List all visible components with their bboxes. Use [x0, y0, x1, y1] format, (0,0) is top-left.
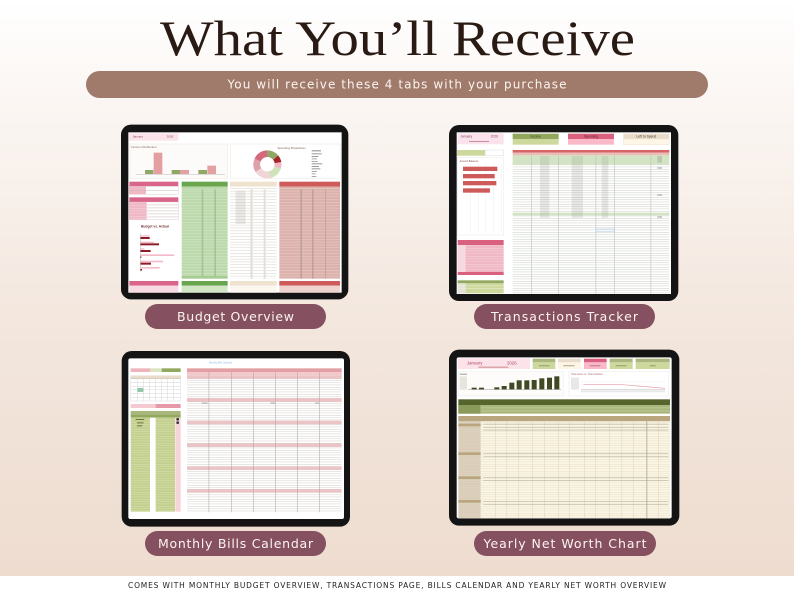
income distribution chart: Income Distribution: [131, 145, 157, 149]
green summary table: [458, 280, 504, 293]
month header: 2026: [167, 134, 174, 138]
label: monthly bills calendar: [145, 531, 326, 556]
label: transactions tracker: [474, 304, 655, 329]
budget vs actual chart: Budget vs. Actual: [141, 225, 169, 229]
month header: January: [460, 135, 473, 139]
label: yearly net worth chart: [474, 531, 656, 556]
label: transactions tracker: Transactions Tracker: [490, 309, 639, 324]
spending breakdown donut: [230, 144, 340, 178]
label: monthly bills calendar: Monthly Bills Calendar: [158, 536, 314, 551]
tablet: budget overview: [121, 125, 348, 299]
income summary: Income: [530, 135, 541, 139]
summary tiles: [533, 359, 670, 369]
mini calendar: [131, 376, 181, 401]
label: budget overview: Budget Overview: [177, 309, 294, 324]
month buttons: [131, 368, 181, 372]
toggle: [131, 404, 181, 408]
debt column: [279, 182, 340, 279]
label: yearly net worth chart: Yearly Net Worth Chart: [482, 536, 647, 551]
spending summary: Spending: [584, 135, 598, 139]
account balances chart: Account Balances: [460, 160, 479, 163]
pink accounts table: [458, 240, 504, 275]
spending breakdown donut: Spending Breakdown: [277, 146, 306, 150]
budget summary table: [129, 197, 178, 220]
account balances chart: [458, 158, 504, 235]
yearly table: [458, 416, 670, 518]
month header: [129, 133, 178, 141]
tablet: monthly bills calendar: [122, 351, 350, 527]
footer note: COMES WITH MONTHLY BUDGET OVERVIEW, TRANSACTIONS PAGE, BILLS CALENDAR AND YEARLY NET WORTH OVERVIEW: [128, 581, 667, 590]
left to spend summary: [623, 134, 669, 145]
net worth bar chart: [458, 372, 563, 396]
subtitle banner: You will receive these 4 tabs with your purchase: [226, 78, 566, 92]
month header: [458, 133, 504, 144]
month header: 2026: [507, 360, 517, 365]
net worth summary band: [458, 399, 670, 414]
toggle: [457, 150, 504, 156]
lower tables: [129, 281, 340, 293]
bills list: [131, 411, 181, 512]
assets vs debt line chart: [569, 372, 668, 396]
income summary: [513, 134, 559, 145]
month header: [458, 358, 530, 369]
transactions table: [513, 150, 669, 294]
tablet: yearly net worth chart: [449, 350, 679, 526]
income distribution chart: [130, 144, 228, 178]
month header: January: [132, 134, 143, 138]
calendar title: Monthly Bills Calendar: [209, 361, 232, 364]
assets vs debt line chart: Total Assets vs. Total Liabilities: [571, 373, 604, 376]
spending summary: [568, 134, 614, 145]
month header: January: [467, 360, 483, 365]
expenses column: [230, 182, 277, 279]
label: budget overview: [145, 304, 326, 329]
title: What You’ll Receive: [160, 10, 635, 66]
savings table: [129, 182, 178, 194]
tablet: transactions tracker: [449, 125, 678, 301]
left to spend summary: Left to Spend: [636, 135, 656, 139]
month header: 2026: [491, 135, 498, 139]
budget vs actual chart: [140, 225, 174, 272]
subtitle banner: [86, 71, 708, 98]
calendar grid: [187, 368, 342, 512]
income column: [182, 182, 228, 279]
